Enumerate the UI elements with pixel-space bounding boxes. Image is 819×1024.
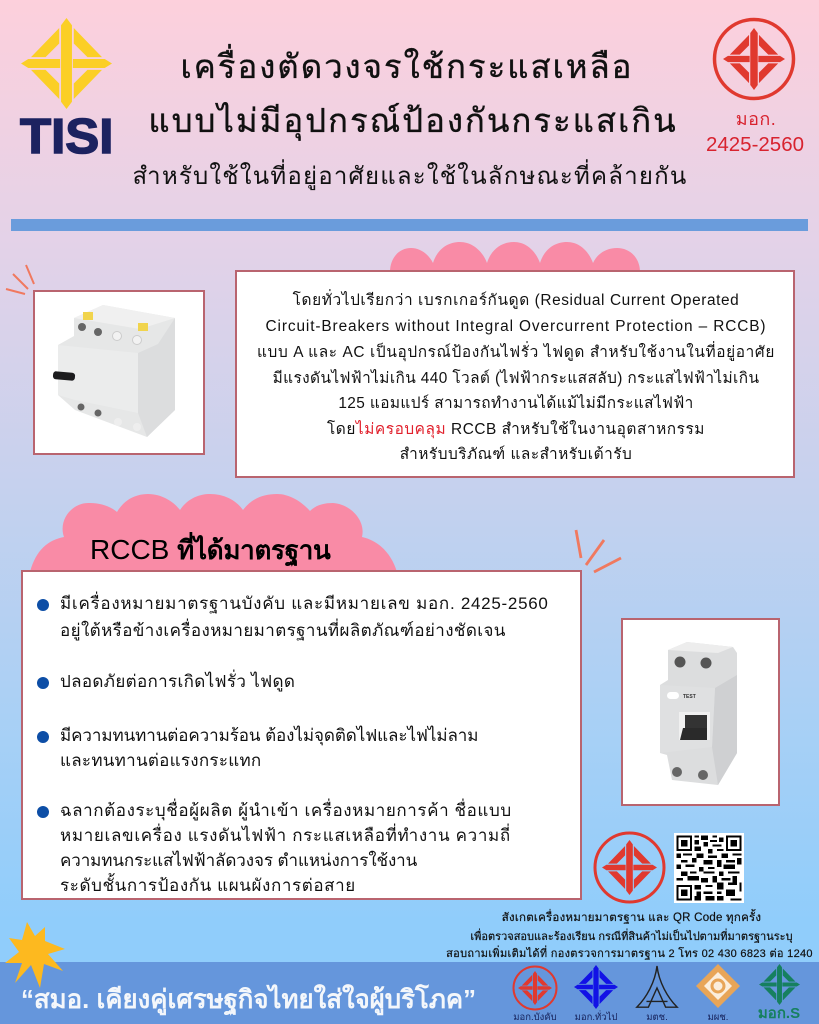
panel: intro text: 125 แอมแปร์ สามารถทำงานได้แม้ไม่มีกระแสไฟฟ้า (338, 395, 694, 412)
logo: MMS diamond (696, 964, 740, 1023)
check-the-mark notice: สอบถามเพิ่มเติมได้ที่ กองตรวจการมาตรฐาน 2 โทร 02 430 6823 ต่อ 1240 (446, 948, 813, 960)
pink cloud behind intro panel (390, 242, 640, 270)
logo: compulsory mark: มอก.บังคับ (513, 1012, 557, 1023)
bullet 4: ฉลากต้องระบุชื่อผู้ผลิต ผู้นำเข้า เครื่องหมายการค้า ชื่อแบบ (60, 801, 512, 820)
panel: intro text: Circuit-Breakers without Integral Overcurrent Protection – RCCB) (266, 318, 766, 335)
icon: two-pole breaker: TEST (683, 694, 696, 700)
panel: intro text: สำหรับบริภัณฑ์ และสำหรับเต้ารับ (400, 446, 632, 463)
bullet 2: ปลอดภัยต่อการเกิดไฟรั่ว ไฟดูด (60, 672, 295, 691)
heading: certified RCCB on pink cloud (30, 494, 396, 570)
icon: four-pole breaker (52, 305, 175, 437)
TISI logo (20, 18, 113, 164)
bullet 3 (37, 726, 478, 770)
check-the-mark notice (446, 908, 813, 960)
TIS mark with standard number: 2425-2560 (706, 133, 804, 156)
icon: red TIS mark (594, 832, 666, 904)
bullet 3: และทนทานต่อแรงกระแทก (60, 751, 262, 770)
logo: S mark: มอก.S (758, 1005, 800, 1022)
icon: yellow TISI diamond (21, 18, 112, 109)
logo: MSS tower: มตช. (646, 1012, 668, 1023)
panel: intro text: โดยทั่วไปเรียกว่า เบรกเกอร์กันดูด (Residual Current Operated (293, 292, 739, 309)
footer band (0, 962, 819, 1024)
bullet 1 (37, 592, 549, 640)
bullet 4: ความทนกระแสไฟฟ้าลัดวงจร ตำแหน่งการใช้งาน (60, 851, 417, 870)
blue divider bar (11, 219, 808, 231)
title: แบบไม่มีอุปกรณ์ป้องกันกระแสเกิน (148, 102, 678, 139)
logo: general mark: มอก.ทั่วไป (575, 1012, 617, 1023)
bullet 1: อยู่ใต้หรือข้างเครื่องหมายมาตรฐานที่ผลิตภัณฑ์อย่างชัดเจน (60, 621, 506, 640)
panel: intro text (235, 270, 795, 478)
TIS mark with standard number (706, 18, 804, 156)
logo: S mark (758, 964, 800, 1022)
standard number label: มอก. (736, 109, 776, 129)
QR code (674, 833, 744, 903)
title: สำหรับใช้ในที่อยู่อาศัยและใช้ในลักษณะที่คล้ายกัน (133, 163, 687, 190)
bullet 3: มีความทนทานต่อความร้อน ต้องไม่จุดติดไฟและไฟไม่ลาม (60, 726, 478, 745)
panel: intro text: แบบ A และ AC เป็นอุปกรณ์ป้องกันไฟรั่ว ไฟดูด สำหรับใช้งานในที่อยู่อาศัย (257, 344, 775, 361)
panel: requirements list (21, 570, 582, 900)
check-the-mark notice: สังเกตเครื่องหมายมาตรฐาน และ QR Code ทุกครั้ง (502, 912, 761, 924)
pink cloud shape (30, 494, 396, 570)
title: เครื่องตัดวงจรใช้กระแสเหลือ (181, 48, 633, 85)
spark lines near heading (574, 530, 622, 574)
logo: MSS tower (635, 966, 679, 1023)
panel: intro text: โดยไม่ครอบคลุม RCCB สำหรับใช้ในงานอุตสาหกรรม (327, 421, 705, 438)
bullet 1: มีเครื่องหมายมาตรฐานบังคับ และมีหมายเลข มอก. 2425-2560 (60, 594, 549, 613)
bullet 4: หมายเลขเครื่อง แรงดันไฟฟ้า กระแสเหลือที่ทำงาน ความถี่ (60, 826, 511, 845)
icon: two-pole breaker (660, 642, 737, 785)
panel: two-pole RCCB photo (621, 618, 780, 806)
heading text: RCCB ที่ได้มาตรฐาน (90, 534, 331, 565)
logo: general mark (574, 965, 618, 1023)
logo: MMS diamond: มผช. (708, 1012, 728, 1023)
icon: yellow starburst (5, 922, 65, 988)
title (133, 44, 687, 190)
panel: intro text: มีแรงดันไฟฟ้าไม่เกิน 440 โวลต์ (ไฟฟ้ากระแสสลับ) กระแสไฟฟ้าไม่เกิน (273, 370, 759, 387)
panel: four-pole RCCB photo (33, 290, 205, 455)
bullet 4 (37, 798, 512, 895)
slogan: “สมอ. เคียงคู่เศรษฐกิจไทยใส่ใจผู้บริโภค” (21, 986, 476, 1014)
spark lines near product photo (6, 264, 35, 295)
TISI wordmark: TISI (20, 110, 113, 164)
bullet 4: ระดับชั้นการป้องกัน แผนผังการต่อสาย (60, 876, 356, 895)
logo: compulsory mark (512, 966, 558, 1023)
icon: red circular TIS mark (712, 18, 796, 100)
check-the-mark notice: เพื่อตรวจสอบและร้องเรียน กรณีที่สินค้าไม่เป็นไปตามที่มาตรฐานระบุ (470, 931, 793, 943)
